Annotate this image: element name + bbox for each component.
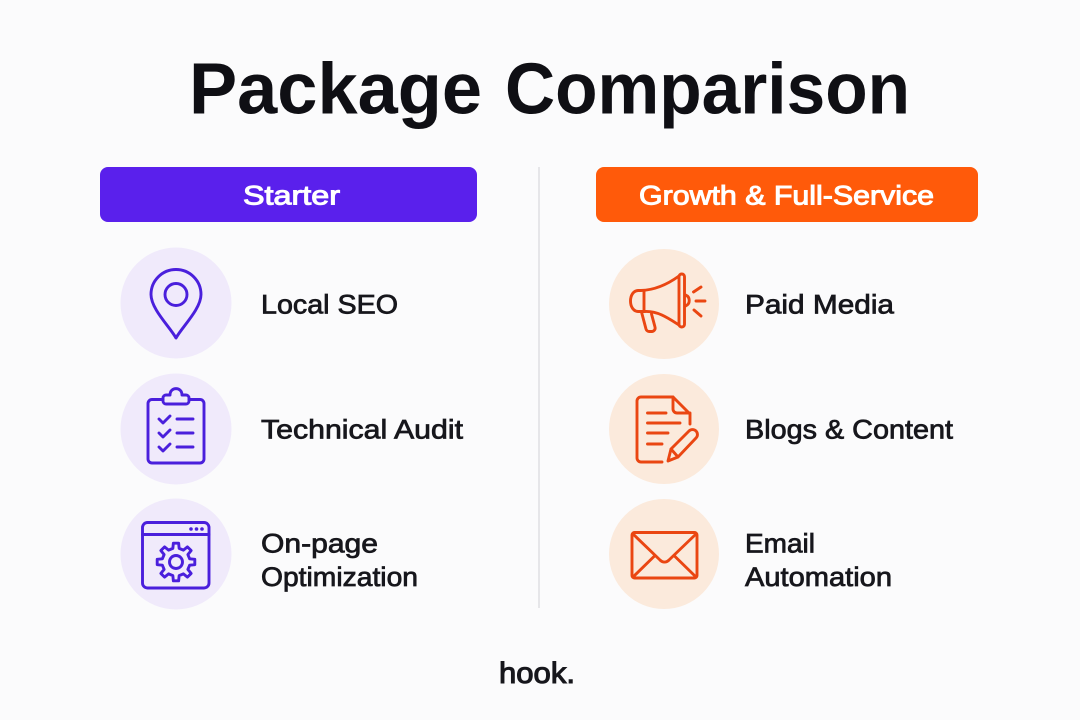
icon: clipboard checklist [120,374,232,484]
title [189,50,910,130]
header: Growth & Full-Service [596,167,978,222]
icon: map pin [120,248,232,358]
label: Email Automation [745,528,892,592]
icon: document with pencil [609,374,719,484]
item: Technical Audit: Technical Audit [261,414,464,444]
panel: Starter [100,167,477,610]
icon: browser window with gear [120,498,232,610]
title: Comparison [505,50,910,130]
label: On-page Optimization: Optimization [261,562,418,592]
icon: megaphone [609,249,719,359]
label: Email Automation: Email [745,528,815,558]
item: Blogs & Content: Blogs & Content [745,414,954,444]
item: Technical Audit [120,374,464,484]
item: Blogs & Content [609,374,954,484]
icon: envelope [609,499,719,609]
label: On-page Optimization [261,528,418,592]
item: Paid Media [609,249,894,359]
item: Local SEO: Local SEO [261,290,398,320]
header: Starter: Starter [243,180,340,210]
label: Email Automation: Automation [745,562,892,592]
header: Growth & Full-Service: Growth & Full-Service [639,180,934,210]
panel: Growth & Full-Service [596,167,978,609]
logo: hook.: hook. [499,657,575,690]
item: Local SEO [120,248,398,358]
label: On-page Optimization: On-page [261,528,378,558]
title: Package [189,50,482,130]
item: On-page Optimization [120,498,418,610]
item: Email Automation [609,499,892,609]
header: Starter [100,167,477,222]
item: Paid Media: Paid Media [745,290,894,320]
